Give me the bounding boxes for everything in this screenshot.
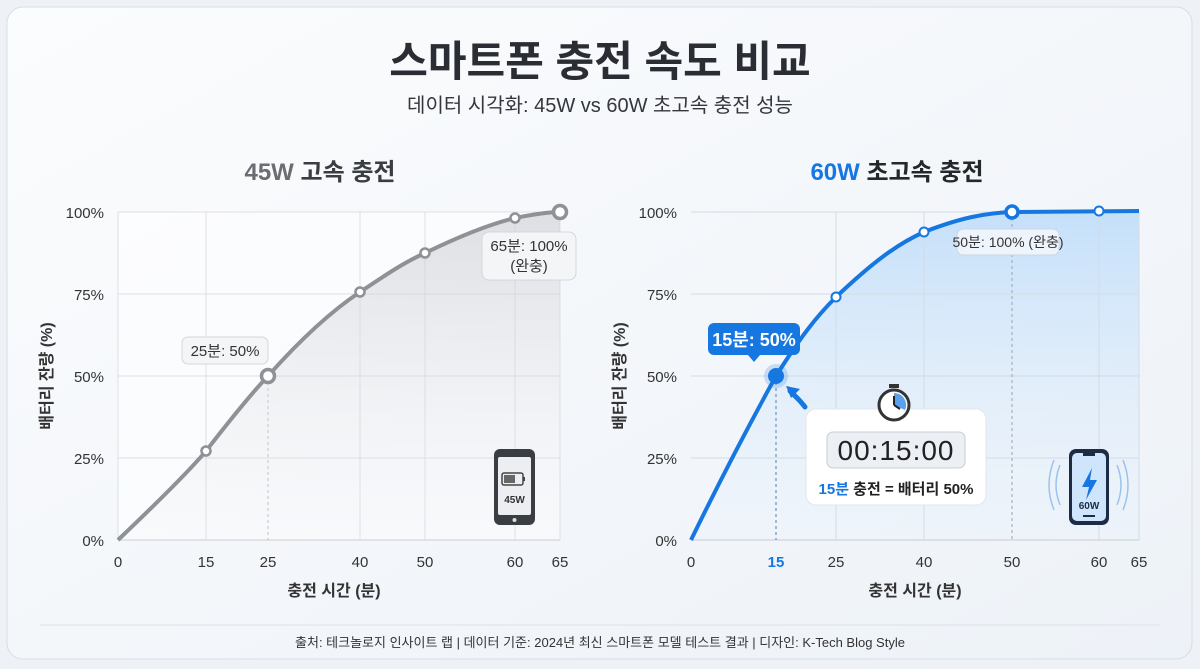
x labels: 15 (768, 554, 784, 571)
x labels: 65 (1131, 554, 1147, 571)
curve 60W (691, 211, 1139, 540)
heading: 60W: 60W 초고속 충전 (810, 159, 984, 186)
x labels (114, 554, 568, 571)
y labels: 50% (647, 369, 677, 386)
callout 15분: 15분: 50% (712, 330, 796, 350)
panel: 45W chart (38, 205, 576, 600)
callout 65분: (완충) (510, 258, 548, 275)
y labels: 100% (639, 205, 677, 222)
callout 65분: 65분: 100% (490, 238, 568, 255)
y labels: 75% (647, 287, 677, 304)
area fill (118, 212, 560, 540)
x labels: 50 (1004, 554, 1020, 571)
timer card: 15분 충전 = 배터리 50% (819, 481, 973, 498)
y labels: 0% (655, 533, 677, 550)
callout 25분: 25분: 50% (191, 343, 259, 360)
x labels: 25 (260, 554, 276, 571)
x labels (687, 554, 1147, 571)
y labels: 0% (82, 533, 104, 550)
callout 25분 (182, 337, 268, 364)
footer: 출처: 테크놀로지 인사이트 랩 | 데이터 기준: 2024년 최신 스마트폰 모델 테스트 결과 | 디자인: K-Tech Blog Style (295, 635, 905, 650)
panel: 45W chart: 배터리 잔량 (%) (38, 322, 56, 430)
timer card (806, 409, 986, 505)
y labels: 25% (647, 451, 677, 468)
callout 65분 (482, 232, 576, 280)
curve 45W (118, 212, 560, 540)
timer card: 00:15:00 (838, 435, 954, 466)
x labels: 0 (114, 554, 122, 571)
icon: 45W phone (494, 449, 535, 525)
panel: 60W chart: 배터리 잔량 (%) (611, 322, 629, 430)
title: 스마트폰 충전 속도 비교 (389, 38, 811, 85)
callout 15분 (708, 323, 800, 362)
icon: 60W phone (1049, 449, 1128, 525)
x labels: 40 (916, 554, 932, 571)
y labels: 50% (74, 369, 104, 386)
x labels: 65 (552, 554, 568, 571)
x labels: 60 (507, 554, 523, 571)
subtitle: 데이터 시각화: 45W vs 60W 초고속 충전 성능 (407, 94, 793, 117)
heading: 45W: 45W 고속 충전 (244, 159, 396, 186)
y labels: 100% (66, 205, 104, 222)
arrow (790, 391, 805, 407)
axis titles: 충전 시간 (분) (868, 582, 962, 600)
x labels: 25 (828, 554, 844, 571)
x labels: 60 (1091, 554, 1107, 571)
panel: 60W chart (611, 205, 1147, 600)
y labels (639, 205, 677, 550)
y labels: 75% (74, 287, 104, 304)
x labels: 40 (352, 554, 368, 571)
axis titles: 충전 시간 (분) (287, 582, 381, 600)
icon: 45W phone: 45W (504, 495, 525, 506)
callout 50분 (952, 229, 1064, 255)
callout 50분: 50분: 100% (완충) (952, 234, 1064, 250)
icon: 60W phone: 60W (1079, 501, 1100, 512)
x labels: 15 (198, 554, 214, 571)
y labels: 25% (74, 451, 104, 468)
y labels (66, 205, 104, 550)
x labels: 0 (687, 554, 695, 571)
x labels: 50 (417, 554, 433, 571)
icon: stopwatch (879, 384, 909, 420)
